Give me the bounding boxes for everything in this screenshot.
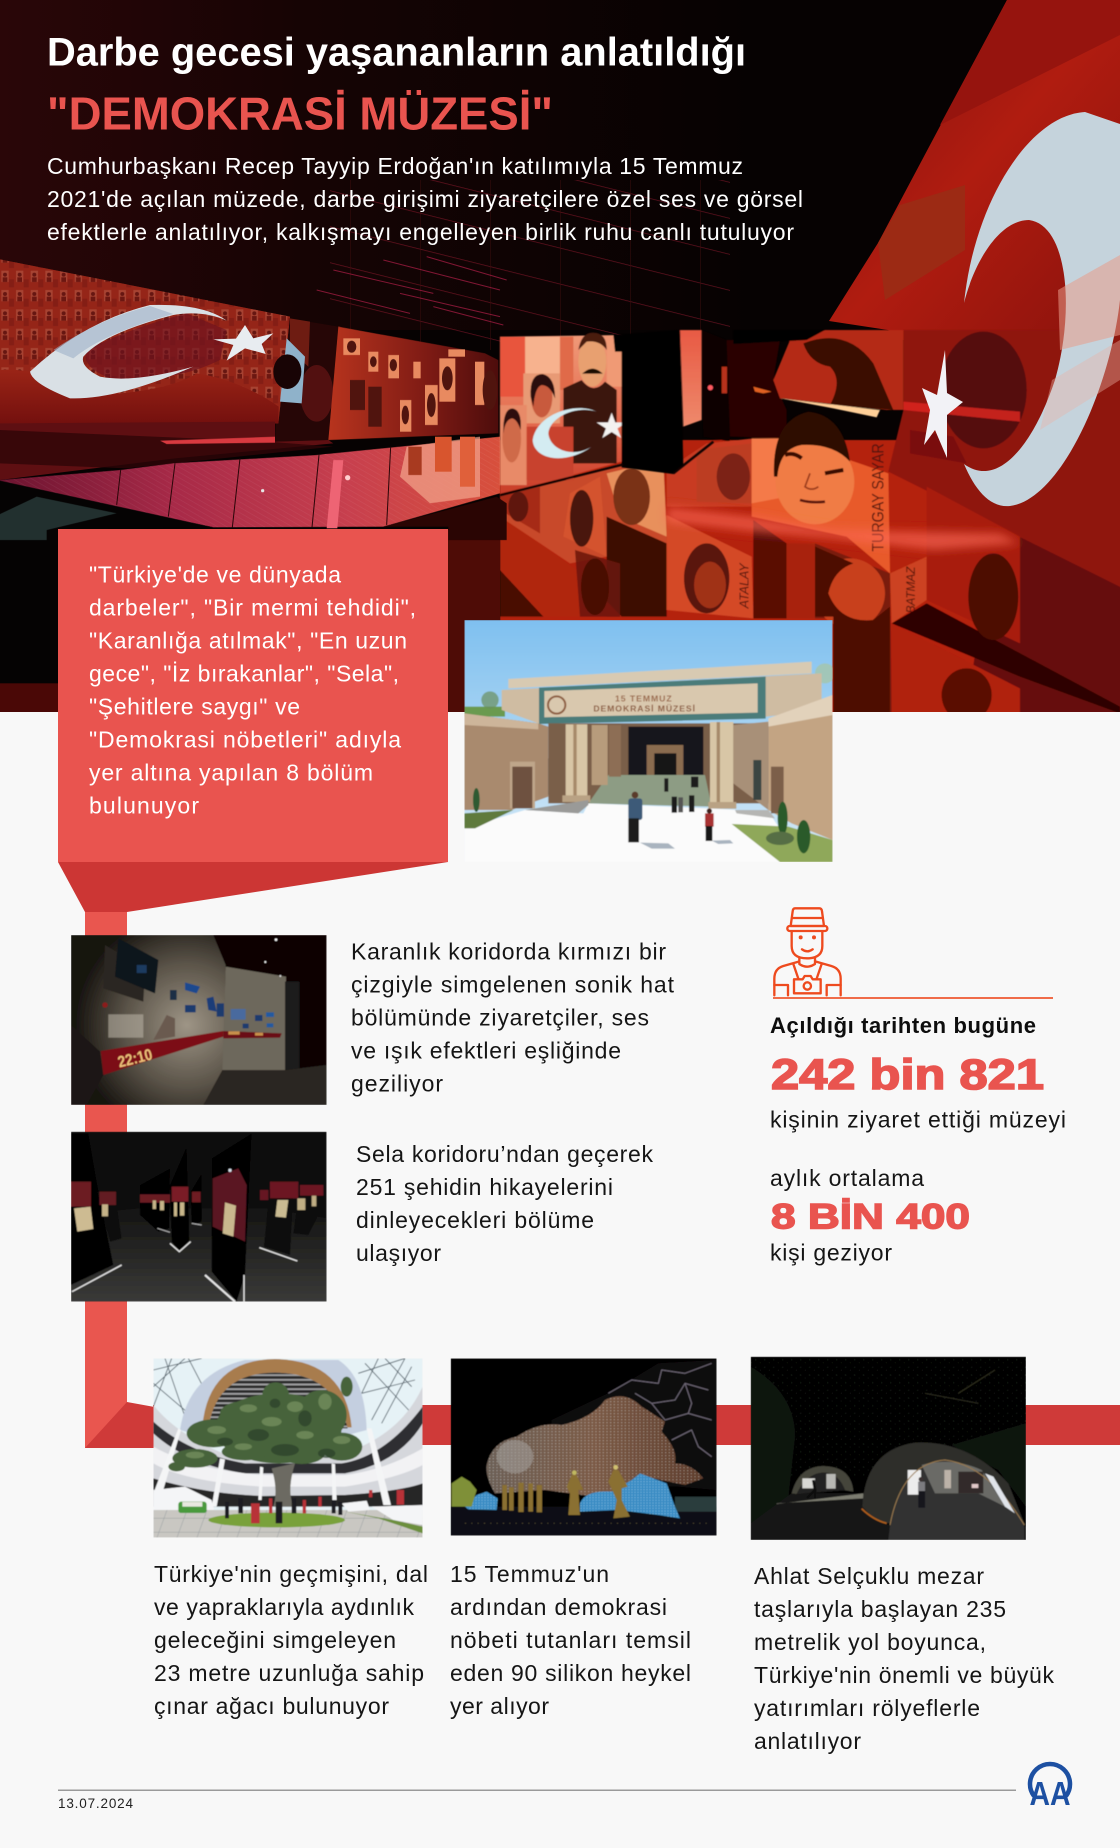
intro paragraph: 2021'de açılan müzede, darbe girişimi ziyaretçilere özel ses ve görsel	[47, 186, 803, 212]
lower right section	[500, 330, 1120, 723]
stat: monthly average	[770, 1165, 970, 1266]
soldiers	[502, 1470, 630, 1518]
icon underline	[773, 997, 1053, 999]
Turgay Sayar panel	[752, 438, 890, 573]
box text: gece", "İz bırakanlar", "Sela",	[89, 660, 399, 686]
photo: sonic line corridor	[71, 935, 327, 1105]
stage floor	[451, 1507, 717, 1536]
box text	[89, 562, 416, 818]
small center flag crescent	[533, 408, 597, 458]
center tall block	[212, 1133, 252, 1302]
right blocks	[264, 1133, 307, 1255]
caption: Ahlat road: Türkiye'nin önemli ve büyük	[754, 1662, 1054, 1688]
box text: "Şehitlere saygı" ve	[89, 694, 300, 720]
caption: plane tree: Türkiye'nin geçmişini, dal	[154, 1561, 428, 1587]
box text: yer altına yapılan 8 bölüm	[89, 760, 373, 786]
caption: sonic line	[351, 938, 675, 1096]
flag wall	[888, 330, 1120, 593]
left crescent	[30, 305, 227, 398]
logo: AA: AA	[1030, 1775, 1070, 1812]
people	[628, 798, 642, 820]
caption: silicone statues: ardından demokrasi	[450, 1594, 667, 1620]
center portrait panel	[500, 330, 713, 495]
left lower portraits	[500, 463, 667, 563]
caption: Sela corridor: dinleyecekleri bölüme	[356, 1207, 594, 1233]
box text: "Karanlığa atılmak", "En uzun	[89, 628, 407, 654]
entrance interior	[548, 723, 768, 803]
greenery	[464, 810, 513, 828]
blue tanks	[580, 1473, 680, 1518]
photo: museum entrance building	[464, 620, 835, 862]
upper right red wall	[829, 0, 1120, 340]
van and people	[178, 1502, 207, 1513]
box text: "Demokrasi nöbetleri" adıyla	[89, 726, 401, 752]
caption: Sela corridor	[356, 1141, 654, 1266]
photo: silicone statues and map	[451, 1358, 717, 1536]
caption: plane tree: 23 metre uzunluğa sahip	[154, 1660, 424, 1686]
second portrait panel	[328, 327, 498, 440]
caption: silicone statues: 15 Temmuz'un	[450, 1561, 609, 1587]
caption: Ahlat road: yatırımları rölyeflerle	[754, 1695, 980, 1721]
map landform	[486, 1396, 703, 1497]
small arch	[792, 1466, 853, 1494]
Atalay panel	[667, 515, 753, 618]
flag fragment	[280, 338, 305, 403]
box text: "Türkiye'de ve dünyada	[89, 562, 341, 588]
forecourt	[464, 802, 780, 862]
floor lights	[72, 1223, 297, 1302]
photo: museum entrance building: DEMOKRASİ MÜZESİ	[593, 704, 695, 714]
left bottom dark	[0, 480, 409, 528]
caption: plane tree: çınar ağacı bulunuyor	[154, 1693, 389, 1719]
caption: sonic line: bölümünde ziyaretçiler, ses	[351, 1004, 649, 1030]
title: Darbe gecesi yaşananların anlatıldığı	[47, 30, 746, 74]
intro paragraph: Cumhurbaşkanı Recep Tayyip Erdoğan'ın katılımıyla 15 Temmuz	[47, 153, 743, 179]
logo: AA	[1030, 1764, 1070, 1812]
photo: museum entrance building: 15 TEMMUZ	[615, 694, 672, 704]
caption: Ahlat road: taşlarıyla başlayan 235	[754, 1596, 1006, 1622]
footer date: 13.07.2024	[58, 1796, 133, 1811]
caption: silicone statues	[450, 1561, 691, 1719]
walls	[464, 713, 548, 810]
caption: Sela corridor: Sela koridoru’ndan geçerek	[356, 1141, 654, 1167]
caption: plane tree: geleceğini simgeleyen	[154, 1627, 396, 1653]
caption: Ahlat road: Ahlat Selçuklu mezar	[754, 1563, 984, 1589]
columns	[566, 724, 587, 796]
subtitle: "DEMOKRASİ MÜZESİ"	[47, 88, 553, 140]
portrait area above Turgay	[773, 330, 903, 410]
caption: plane tree: ve yapraklarıyla aydınlık	[154, 1594, 414, 1620]
caption: silicone statues: yer alıyor	[450, 1693, 549, 1719]
intro paragraph	[47, 153, 803, 245]
icon: tourist with camera	[774, 908, 841, 995]
big arch	[862, 1443, 1025, 1525]
right star	[922, 350, 963, 458]
grid streaks	[317, 257, 507, 325]
stat: total visitors: kişinin ziyaret ettiği müzeyi	[770, 1106, 1066, 1132]
sign panel	[539, 677, 766, 724]
intro paragraph: efektlerle anlatılıyor, kalkışmayı engelleyen birlik ruhu canlı tutuluyor	[47, 219, 794, 245]
caption: sonic line: geziliyor	[351, 1070, 443, 1096]
caption: Ahlat road: metrelik yol boyunca,	[754, 1629, 986, 1655]
stat: total visitors	[770, 1013, 1066, 1132]
photo: plane tree atrium	[153, 1358, 423, 1538]
left star	[213, 325, 273, 361]
title	[47, 30, 746, 140]
red shelf	[101, 1031, 223, 1075]
photo: Ahlat tunnel arches	[751, 1357, 1026, 1540]
caption: sonic line: çizgiyle simgelenen sonik hat	[351, 972, 675, 998]
lower right section: TURGAY SAYAR	[868, 443, 887, 552]
panel: red info box	[58, 529, 448, 912]
balconies	[153, 1387, 423, 1507]
wooden arch and dome	[202, 1359, 352, 1427]
right crescent	[964, 112, 1120, 506]
caption: sonic line: Karanlık koridorda kırmızı bir	[351, 938, 666, 964]
main left wall	[0, 259, 290, 423]
left section	[0, 257, 507, 717]
lower right section: ATALAY	[737, 562, 751, 609]
floor strip left of Turgay	[667, 438, 753, 507]
caption: silicone statues: eden 90 silikon heykel	[450, 1660, 691, 1686]
wall behind	[275, 317, 338, 442]
hero photo: museum interior with Turkish flags	[0, 0, 1120, 723]
paving	[153, 1510, 423, 1538]
caption: sonic line: ve ışık efektleri eşliğinde	[351, 1038, 621, 1064]
ribbon: vertical red connector with fold into horizontal band	[85, 905, 1120, 1448]
stat: monthly average: aylık ortalama	[770, 1165, 924, 1191]
upper balustrade	[508, 662, 812, 688]
small center star	[596, 413, 627, 438]
photo: Sela corridor	[71, 1132, 327, 1302]
number: 8 BİN 400: 8 BİN 400	[771, 1198, 970, 1236]
dark red strip beside box	[448, 530, 500, 712]
floor	[751, 1493, 1026, 1540]
middle rows	[140, 1168, 170, 1232]
floor panel	[0, 437, 500, 527]
grass	[208, 1513, 345, 1527]
tree trunk	[272, 1463, 295, 1507]
box text: bulunuyor	[89, 792, 199, 818]
caption: plane tree	[154, 1561, 428, 1719]
tree canopy	[168, 1377, 362, 1471]
caption: Ahlat road	[754, 1563, 1054, 1754]
glow band	[667, 507, 1020, 550]
footer rule	[58, 1790, 1016, 1791]
dark lower bands	[0, 422, 333, 480]
caption: Ahlat road: anlatılıyor	[754, 1728, 861, 1754]
stat: total visitors: Açıldığı tarihten bugüne	[770, 1013, 1036, 1038]
wall screens	[103, 945, 145, 1002]
left block	[71, 1133, 113, 1285]
bearded portrait	[815, 543, 892, 713]
photo: sonic line corridor: 22:10	[116, 1047, 154, 1072]
stat: monthly average: kişi geziyor	[770, 1240, 892, 1266]
caption: Sela corridor: 251 şehidin hikayelerini	[356, 1174, 613, 1200]
number: 242 bin 821: 242 bin 821	[771, 1051, 1044, 1099]
box text: darbeler", "Bir mermi tehdidi",	[89, 594, 416, 620]
black column	[613, 330, 683, 474]
caption: silicone statues: nöbeti tutanları temsil	[450, 1627, 691, 1653]
caption: Sela corridor: ulaşıyor	[356, 1240, 441, 1266]
dark right of column	[706, 340, 730, 442]
lower right section: BATMAZ	[904, 566, 918, 613]
box fold	[58, 862, 448, 912]
